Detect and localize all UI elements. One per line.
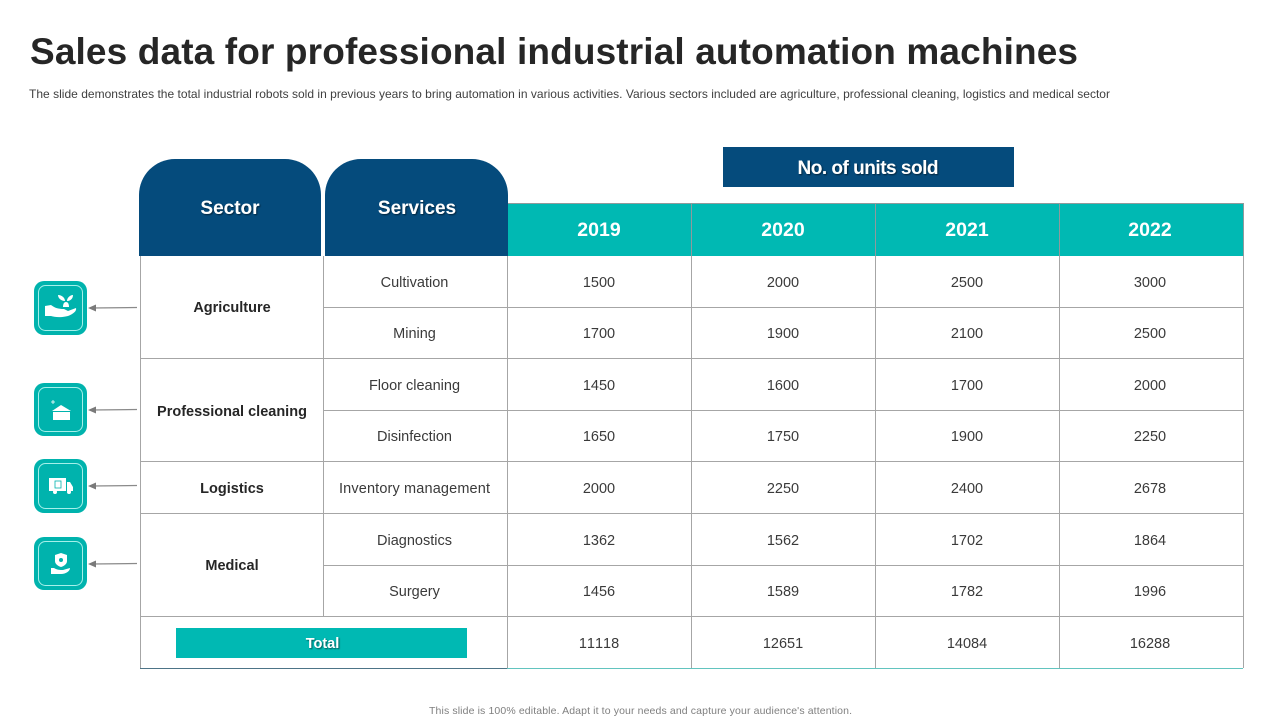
services column: Cultivation	[381, 275, 448, 291]
table header: years	[507, 203, 1244, 256]
units column: 2020: 1750	[767, 429, 799, 445]
services column: Floor cleaning	[369, 378, 460, 394]
heading: no. of units sold	[723, 147, 1014, 187]
sector labels: Medical	[205, 558, 259, 574]
sector labels: Logistics	[200, 481, 264, 497]
arrow: medical	[88, 560, 137, 568]
units column: 2021: 2100	[951, 326, 983, 342]
units column: 2022: 1996	[1134, 584, 1166, 600]
icon: medical shield in hand	[34, 537, 87, 590]
total bar: Total	[306, 636, 339, 652]
units column: 2019: 1700	[583, 326, 615, 342]
units column: 2020: 1589	[767, 584, 799, 600]
table grid	[140, 256, 1244, 668]
table header: years: 2021	[945, 219, 989, 241]
units column: 2021: 1900	[951, 429, 983, 445]
table header: years: 2020	[761, 219, 805, 241]
sector labels: Agriculture	[193, 300, 271, 316]
units column: 2020: 1562	[767, 533, 799, 549]
services column: Diagnostics	[377, 533, 452, 549]
title: Sales data for professional industrial automation machines	[30, 31, 1078, 72]
units column: 2021: 1782	[951, 584, 983, 600]
units column: 2022: 16288	[1130, 636, 1170, 652]
subtitle text: The slide demonstrates the total industrial robots sold in previous years to bring automation in various activities. Various sectors included are agriculture, professional cleaning, logistics and medical sector	[29, 87, 1110, 101]
units column: 2019	[579, 275, 619, 652]
units column: 2019: 11118	[579, 636, 619, 652]
units column: 2021: 1700	[951, 378, 983, 394]
units column: 2020: 2000	[767, 275, 799, 291]
sector labels	[157, 300, 307, 574]
services column	[339, 275, 490, 600]
header tab: services	[325, 159, 508, 256]
units column: 2021: 2500	[951, 275, 983, 291]
units column: 2022: 1864	[1134, 533, 1166, 549]
units column: 2021: 14084	[947, 636, 987, 652]
units column: 2020: 1900	[767, 326, 799, 342]
services column: Inventory management	[339, 481, 490, 497]
units column: 2019: 1362	[583, 533, 615, 549]
units column: 2022: 2250	[1134, 429, 1166, 445]
units column: 2020: 1600	[767, 378, 799, 394]
units column: 2021: 2400	[951, 481, 983, 497]
units column: 2022: 2000	[1134, 378, 1166, 394]
header tab: sector: Sector	[200, 198, 260, 219]
units column: 2019: 2000	[583, 481, 615, 497]
units column: 2021	[947, 275, 987, 652]
icon: professional cleaning house	[34, 383, 87, 436]
units column: 2019: 1456	[583, 584, 615, 600]
services column: Mining	[393, 326, 436, 342]
total bar	[176, 628, 467, 658]
units column: 2022: 2500	[1134, 326, 1166, 342]
arrow: agriculture	[88, 304, 137, 312]
units column: 2022	[1130, 275, 1170, 652]
units column: 2021: 1702	[951, 533, 983, 549]
services column: Disinfection	[377, 429, 452, 445]
header tab: services: Services	[378, 198, 456, 219]
arrow: logistics	[88, 482, 137, 490]
heading: no. of units sold: No. of units sold	[798, 158, 938, 179]
units column: 2022: 2678	[1134, 481, 1166, 497]
units column: 2019: 1650	[583, 429, 615, 445]
icon: agriculture hand and plant	[34, 281, 87, 335]
footer note: This slide is 100% editable. Adapt it to your needs and capture your audience's attention.	[429, 705, 852, 717]
table header: years: 2019	[577, 219, 621, 241]
sector labels: Professional cleaning	[157, 404, 307, 420]
table header: years: 2022	[1128, 219, 1172, 241]
services column: Surgery	[389, 584, 441, 600]
units column: 2020: 12651	[763, 636, 803, 652]
arrow: professional cleaning	[88, 406, 137, 414]
header tab: sector	[139, 159, 321, 256]
units column: 2020	[763, 275, 803, 652]
units column: 2020: 2250	[767, 481, 799, 497]
units column: 2022: 3000	[1134, 275, 1166, 291]
units column: 2019: 1500	[583, 275, 615, 291]
icon: logistics truck	[34, 459, 87, 513]
units column: 2019: 1450	[583, 378, 615, 394]
